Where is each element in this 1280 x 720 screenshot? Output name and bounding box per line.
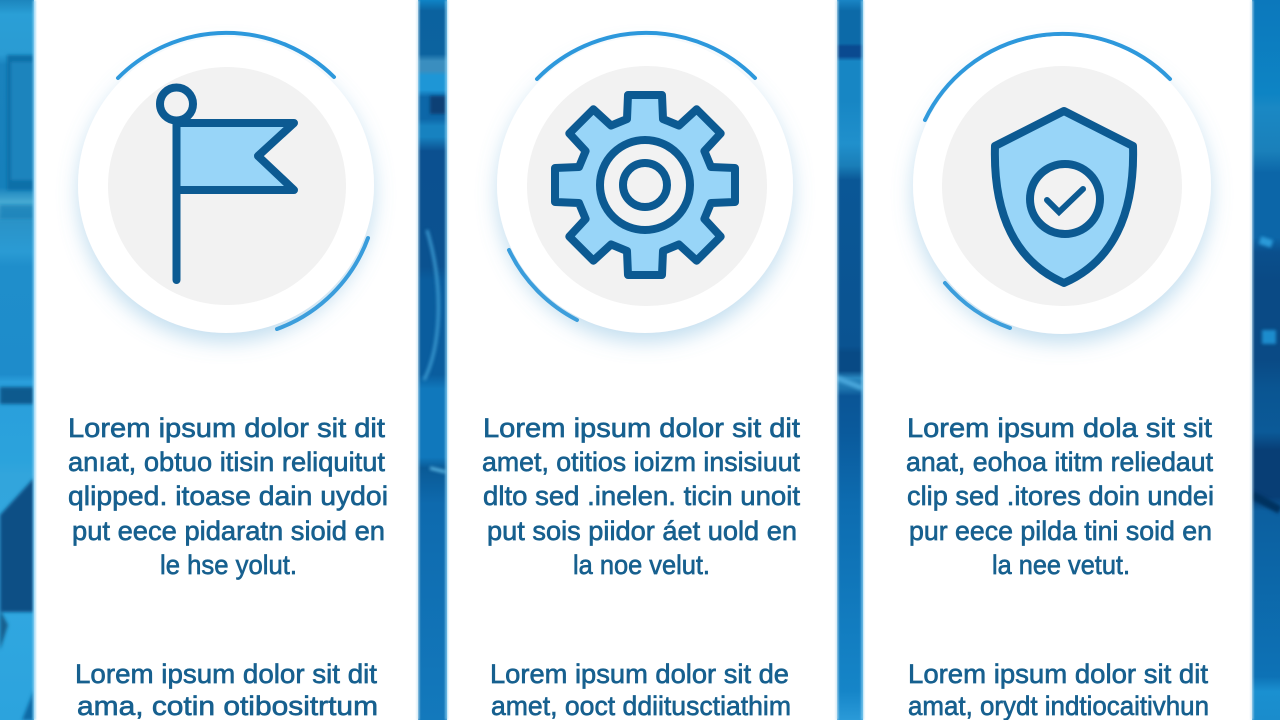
text block: right lower paragraph xyxy=(908,659,1209,720)
text block: middle upper paragraph: put sois piidor áet uold en xyxy=(487,516,797,546)
text block: right upper paragraph: pur eece pilda tini soid en xyxy=(909,516,1212,546)
icon: gear badge xyxy=(497,33,793,333)
text block: right upper paragraph: clip sed .itores doin undei xyxy=(907,481,1214,511)
text block: left upper paragraph: qlipped. itoase dain uydoi xyxy=(68,481,388,511)
text block: left upper paragraph: put eece pidaratn sioid en xyxy=(72,516,385,546)
text block: left upper paragraph: le hse yolut. xyxy=(160,550,297,580)
text block: middle upper paragraph: Lorem ipsum dolor sit dit xyxy=(483,413,801,443)
text block: left upper paragraph: anıat, obtuo itisin reliquitut xyxy=(68,447,385,477)
text block: middle lower paragraph: Lorem ipsum dolor sit de xyxy=(490,659,789,689)
icon: shield badge xyxy=(913,34,1211,334)
text block: middle lower paragraph xyxy=(490,659,791,720)
text block: middle upper paragraph: amet, otitios ioizm insisiuut xyxy=(482,447,800,477)
text block: left lower paragraph xyxy=(75,659,378,720)
text block: left lower paragraph: Lorem ipsum dolor sit dit xyxy=(75,659,377,689)
text block: middle upper paragraph: la noe velut. xyxy=(573,550,710,580)
text block: left upper paragraph xyxy=(68,413,388,580)
panel: right card xyxy=(862,0,1253,720)
text block: right upper paragraph xyxy=(906,413,1214,580)
text block: right upper paragraph: Lorem ipsum dola sit sit xyxy=(907,413,1213,443)
text block: right upper paragraph: anat, eohoa ititm reliedaut xyxy=(906,447,1213,477)
text block: middle upper paragraph xyxy=(482,413,801,580)
panel: left card xyxy=(33,0,419,720)
text block: right upper paragraph: la nee vetut. xyxy=(992,550,1130,580)
text block: left upper paragraph: Lorem ipsum dolor sit dit xyxy=(68,413,386,443)
text block: middle upper paragraph: dlto sed .inelen. ticin unoit xyxy=(483,481,801,511)
panel: middle card xyxy=(446,0,838,720)
text block: right lower paragraph: Lorem ipsum dolor sit dit xyxy=(908,659,1208,689)
icon: flag badge xyxy=(78,33,374,333)
